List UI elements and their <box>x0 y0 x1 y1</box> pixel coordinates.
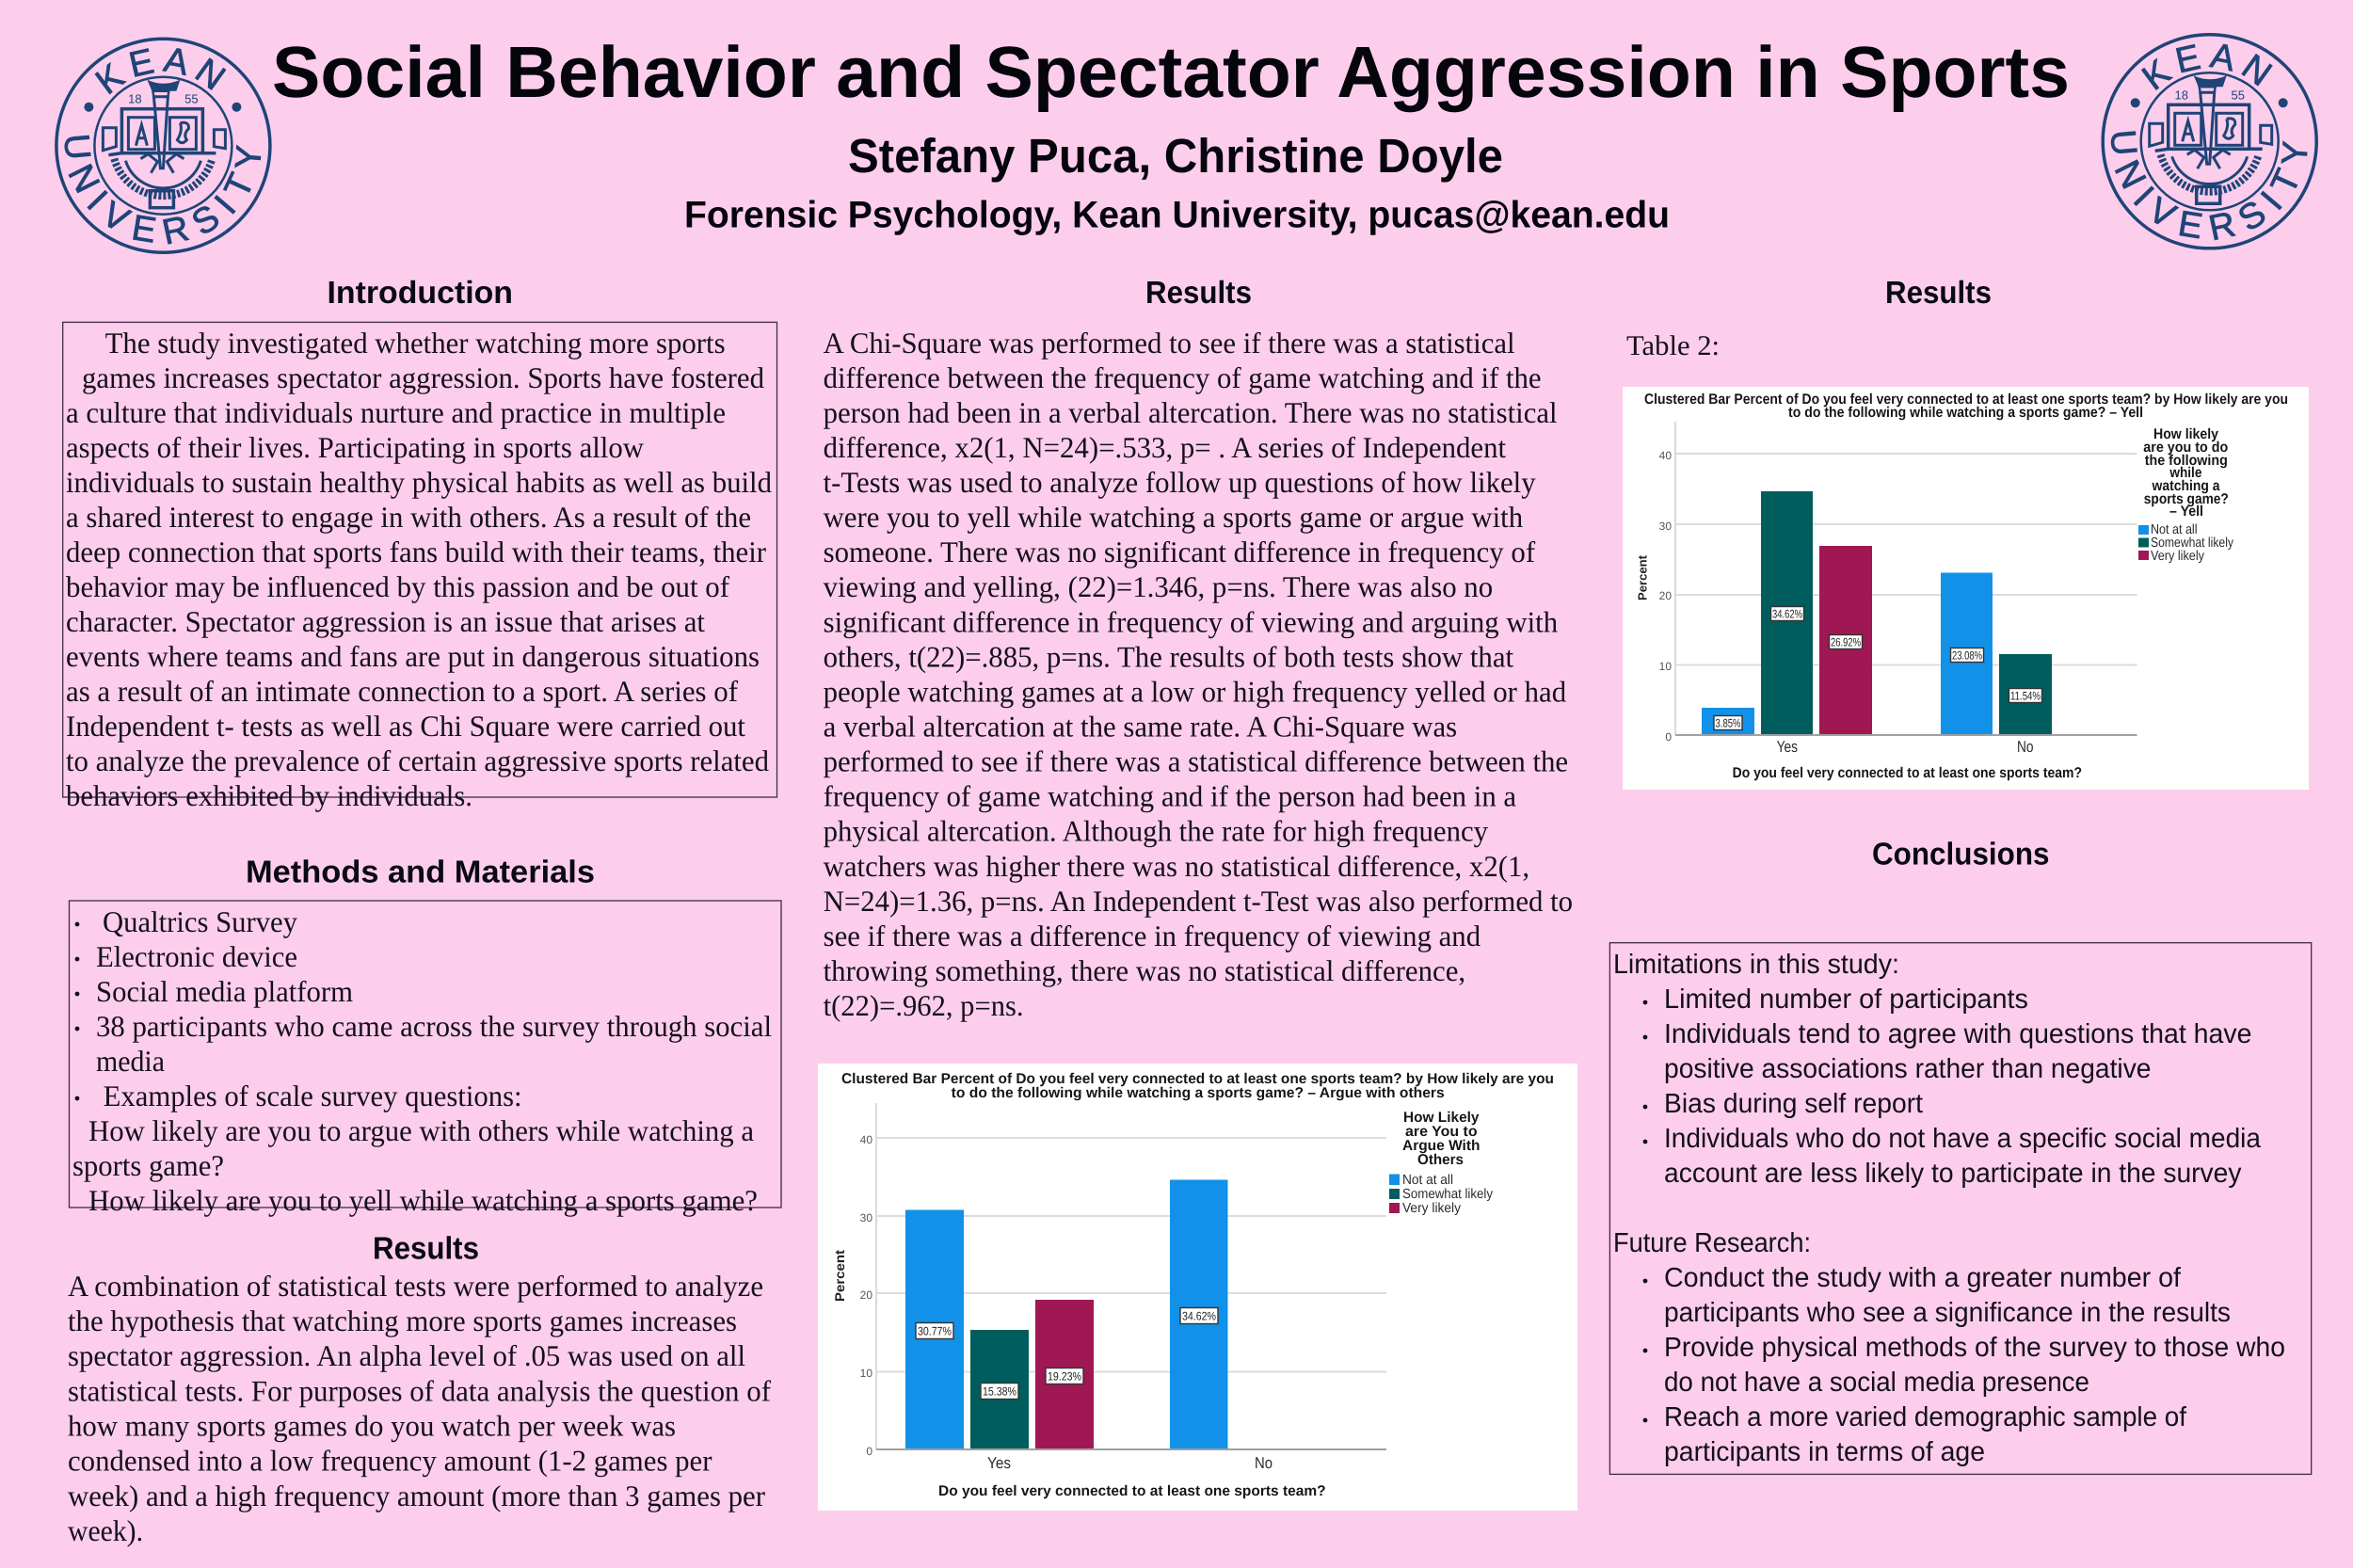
limitations text: account are less likely to participate in the survey <box>1664 1159 2242 1189</box>
panel: introduction <box>63 322 776 812</box>
methods text: How likely are you to yell while watching a sports game? <box>88 1184 758 1217</box>
data labels <box>916 1308 1218 1399</box>
text block: results, middle column <box>824 327 1573 1022</box>
y tick labels: 20 <box>860 1288 872 1302</box>
chart: argue with others clustered bar <box>818 1064 1577 1511</box>
methods text: Social media platform <box>96 975 353 1008</box>
data labels: 30.77% <box>918 1325 952 1338</box>
data labels: 15.38% <box>983 1385 1016 1399</box>
y tick labels: 20 <box>1659 589 1672 602</box>
icon: Kean University seal, right: 18 <box>2174 88 2188 102</box>
chart background <box>1623 387 2309 790</box>
data labels: 23.08% <box>1952 649 1982 663</box>
y tick labels: 30 <box>1659 520 1672 533</box>
data labels: 34.62% <box>1182 1310 1216 1323</box>
legend <box>1389 1110 1494 1216</box>
methods text: Qualtrics Survey <box>103 905 297 938</box>
legend: are You to <box>1405 1124 1478 1140</box>
introduction text: games increases spectator aggression. Sports have fostered <box>82 361 764 394</box>
icon: Kean University seal, left: KEAN <box>94 48 226 94</box>
legend: Others <box>1417 1152 1464 1168</box>
introduction text: to analyze the prevalence of certain aggressive sports related <box>66 744 769 777</box>
icon: Kean University seal, right: UNIVERSITY <box>2110 131 2308 241</box>
methods box <box>70 901 781 1208</box>
chart background <box>818 1064 1577 1511</box>
data labels: 19.23% <box>1048 1370 1081 1384</box>
chart title: Clustered Bar Percent of Do you feel very connected to at least one sports team? by How likely are you <box>1644 392 2288 408</box>
baseline <box>1675 734 2137 736</box>
introduction box <box>63 322 776 797</box>
methods bullets <box>75 922 79 1100</box>
limitations text: Limitations in this study: <box>1613 950 1899 980</box>
title: Social Behavior and Spectator Aggression in Sports <box>272 32 2070 113</box>
panel: conclusions <box>1609 943 2312 1474</box>
gridlines and axes <box>876 1103 1386 1449</box>
x category labels <box>987 1454 1273 1472</box>
introduction text: events where teams and fans are put in dangerous situations <box>66 640 760 673</box>
limitations text: Limited number of participants <box>1664 984 2028 1015</box>
y tick labels: 40 <box>1659 449 1672 462</box>
legend: the following <box>2145 453 2228 469</box>
baseline <box>876 1448 1386 1450</box>
legend: sports game? <box>2144 491 2229 507</box>
methods text: How likely are you to argue with others while watching a <box>88 1114 754 1147</box>
panel: methods and materials <box>70 901 781 1217</box>
future research text: Conduct the study with a greater number of <box>1664 1263 2182 1293</box>
y tick labels: 0 <box>1665 730 1672 744</box>
text block: results, left column: the hypothesis that watching more sports games increases <box>68 1304 737 1337</box>
text block: results, middle column: A Chi-Square was performed to see if there was a statistical <box>824 327 1515 360</box>
icon: Kean University seal, right: KEAN <box>2140 43 2273 90</box>
introduction text: as a result of an intimate connection to a sport. A series of <box>66 675 738 708</box>
methods text: sports game? <box>72 1149 224 1182</box>
y tick labels: 0 <box>866 1445 872 1458</box>
introduction text: behavior may be influenced by this passion and be out of <box>66 570 729 603</box>
y tick labels <box>1659 449 1672 744</box>
text block: results, middle column: physical altercation. Although the rate for high frequency <box>824 815 1488 847</box>
legend: Not at all <box>2151 522 2197 537</box>
text block: results, left column: week). <box>68 1514 143 1547</box>
text block: results, middle column: N=24)=1.36, p=ns. An Independent t-Test was also performed to <box>824 885 1573 918</box>
methods text: 38 participants who came across the survey through social <box>96 1010 772 1043</box>
heading: Results, left column: Results <box>373 1231 479 1267</box>
x axis title: Do you feel very connected to at least one sports team? <box>1733 765 2082 781</box>
chart title: to do the following while watching a sports game? – Yell <box>1788 405 2143 421</box>
legend: Not at all <box>1402 1173 1453 1188</box>
conclusions box <box>1609 943 2312 1474</box>
authors: Stefany Puca, Christine Doyle <box>848 129 1503 183</box>
text block: results, left column: spectator aggression. An alpha level of .05 was used on all <box>68 1339 745 1372</box>
text block: results, middle column: watchers was higher there was no statistical difference, x2(1, <box>824 850 1529 883</box>
text block: results, left column: week) and a high frequency amount (more than 3 games per <box>68 1480 765 1512</box>
heading: Conclusions: Conclusions <box>1872 838 2050 872</box>
text block: results, left column: how many sports games do you watch per week was <box>68 1410 676 1442</box>
future research text: Future Research: <box>1613 1228 1811 1258</box>
introduction text: a culture that individuals nurture and practice in multiple <box>66 396 726 429</box>
x category labels: No <box>1255 1454 1273 1472</box>
text block: results, left column: statistical tests. For purposes of data analysis the question of <box>68 1374 771 1408</box>
introduction text <box>66 327 772 812</box>
future research text: participants who see a significance in the results <box>1664 1298 2231 1328</box>
limitations text <box>1613 950 2262 1189</box>
legend: while <box>2169 465 2202 481</box>
limitations text: Individuals who do not have a specific social media <box>1664 1124 2262 1154</box>
methods text: media <box>96 1045 165 1078</box>
heading: Results, middle column: Results <box>1145 276 1252 311</box>
y tick labels <box>860 1133 872 1458</box>
text block: results, left column: condensed into a low frequency amount (1-2 games per <box>68 1444 712 1478</box>
x category labels: Yes <box>1777 738 1798 756</box>
text block: results, middle column: t-Tests was used to analyze follow up questions of how likely <box>824 466 1536 499</box>
chart title: to do the following while watching a sports game? – Argue with others <box>952 1085 1445 1101</box>
data labels: 3.85% <box>1715 717 1741 730</box>
limitations text: Bias during self report <box>1664 1089 1923 1119</box>
introduction text: Independent t- tests as well as Chi Square were carried out <box>66 710 745 743</box>
caption: Table 2: Table 2: <box>1626 330 1720 361</box>
text block: results, middle column: significant difference in frequency of viewing and arguing with <box>824 606 1558 638</box>
methods text <box>72 905 772 1217</box>
chart title: Clustered Bar Percent of Do you feel very connected to at least one sports team? by How likely are you <box>841 1071 1554 1087</box>
introduction text: deep connection that sports fans build with their teams, their <box>66 536 766 568</box>
icon: Kean University seal, left: UNIVERSITY <box>64 136 262 245</box>
data labels: 34.62% <box>1772 608 1802 621</box>
text block: results, middle column: a verbal altercation at the same rate. A Chi-Square was <box>824 710 1457 744</box>
legend: watching a <box>2152 478 2220 494</box>
chart title <box>841 1071 1554 1101</box>
y tick labels: 30 <box>860 1211 872 1224</box>
introduction text: character. Spectator aggression is an issue that arises at <box>66 605 705 638</box>
icon: Kean University seal, right <box>2101 33 2318 250</box>
icon: Kean University seal, left: 55 <box>184 92 199 106</box>
text block: results, middle column: throwing something, there was no statistical difference, <box>824 954 1465 987</box>
bars <box>905 1180 1227 1449</box>
gridlines and axes <box>1675 422 2137 735</box>
x category labels: Yes <box>987 1454 1011 1472</box>
legend: – Yell <box>2169 504 2203 520</box>
text block: results, middle column: viewing and yelling, (22)=1.346, p=ns. There was also no <box>824 570 1493 603</box>
y axis title: Percent <box>1636 554 1649 600</box>
legend: Argue With <box>1402 1138 1480 1154</box>
text block: results, middle column: difference between the frequency of game watching and if the <box>824 361 1542 394</box>
y tick labels: 40 <box>860 1133 872 1146</box>
text block: results, middle column: others, t(22)=.885, p=ns. The results of both tests show that <box>824 640 1513 674</box>
limitations text: Individuals tend to agree with questions that have <box>1664 1019 2251 1049</box>
y tick labels: 10 <box>1659 660 1672 673</box>
text block: results, middle column: t(22)=.962, p=ns. <box>824 989 1024 1022</box>
icon: Kean University seal, left: 18 <box>128 92 142 106</box>
introduction text: The study investigated whether watching more sports <box>105 327 726 360</box>
legend: How Likely <box>1403 1110 1480 1126</box>
text block: results, middle column: frequency of game watching and if the person had been in a <box>824 779 1516 813</box>
chart title <box>1644 392 2288 421</box>
introduction text: aspects of their lives. Participating in sports allow <box>66 431 644 464</box>
limitations text: positive associations rather than negative <box>1664 1054 2152 1084</box>
chart: yell clustered bar <box>1623 387 2309 790</box>
text block: results, middle column: people watching games at a low or high frequency yelled or had <box>824 676 1566 708</box>
data labels <box>1714 606 2042 730</box>
future research text: do not have a social media presence <box>1664 1368 2089 1398</box>
data labels: 26.92% <box>1831 636 1861 649</box>
y tick labels: 10 <box>860 1367 872 1380</box>
y axis title: Percent <box>832 1250 847 1302</box>
introduction text: a shared interest to engage in with others. As a result of the <box>66 501 751 534</box>
bars <box>1702 491 2052 735</box>
legend: Very likely <box>2151 549 2205 564</box>
text block: results, left column: A combination of statistical tests were performed to analyze <box>68 1270 763 1303</box>
introduction text: individuals to sustain healthy physical habits as well as build <box>66 466 772 499</box>
heading: Introduction: Introduction <box>328 276 513 311</box>
legend: How likely <box>2153 426 2218 442</box>
data labels: 11.54% <box>2010 689 2041 702</box>
legend: are you to do <box>2143 440 2228 456</box>
heading: Results, right column: Results <box>1885 276 1992 311</box>
text block: results, middle column: see if there was a difference in frequency of viewing and <box>824 920 1481 952</box>
legend: Very likely <box>1402 1201 1462 1216</box>
text block: results, left column <box>68 1270 771 1547</box>
legend <box>2138 426 2234 564</box>
text block: results, middle column: performed to see if there was a statistical difference between the <box>824 745 1568 777</box>
text block: results, middle column: someone. There was no significant difference in frequency of <box>824 536 1536 568</box>
future research text <box>1613 1228 2285 1467</box>
future research text: Provide physical methods of the survey to those who <box>1664 1333 2285 1363</box>
methods text: Electronic device <box>96 940 297 973</box>
future research text: Reach a more varied demographic sample of <box>1664 1402 2187 1432</box>
x category labels <box>1777 738 2033 756</box>
x axis title: Do you feel very connected to at least one sports team? <box>938 1483 1326 1499</box>
x category labels: No <box>2017 738 2033 756</box>
future research text: participants in terms of age <box>1664 1437 1985 1467</box>
text block: results, middle column: person had been in a verbal altercation. There was no statistical <box>824 396 1558 429</box>
introduction text: behaviors exhibited by individuals. <box>66 779 472 812</box>
affiliation: Forensic Psychology, Kean University, pucas@kean.edu <box>684 194 1670 235</box>
text block: results, middle column: difference, x2(1, N=24)=.533, p= . A series of Independent <box>824 431 1506 464</box>
text block: results, middle column: were you to yell while watching a sports game or argue with <box>824 501 1523 534</box>
conclusions bullets <box>1643 1000 1647 1422</box>
legend: Somewhat likely <box>1402 1187 1494 1202</box>
icon: Kean University seal, right: 55 <box>2231 88 2245 102</box>
icon: Kean University seal, left <box>55 38 272 254</box>
methods text: Examples of scale survey questions: <box>104 1080 522 1112</box>
legend: Somewhat likely <box>2151 536 2234 551</box>
heading: Methods and Materials: Methods and Materials <box>246 855 595 890</box>
